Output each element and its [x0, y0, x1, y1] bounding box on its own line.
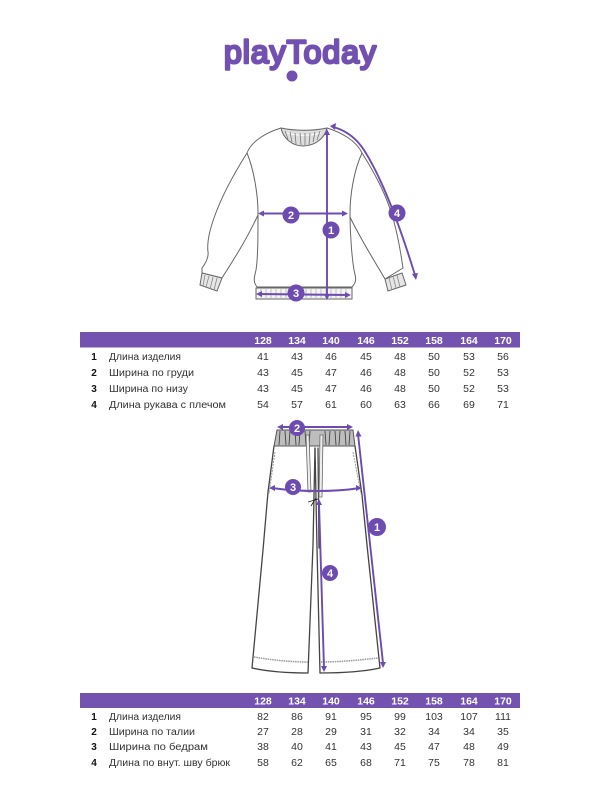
row 1: 82	[257, 711, 269, 723]
left cuff	[200, 273, 222, 291]
row 2: 35	[497, 726, 509, 738]
arrow 3: hem width: 3	[293, 288, 299, 300]
row 2: Ширина по груди	[109, 368, 194, 379]
row 4: 4	[91, 758, 97, 769]
row 4: 54	[257, 399, 269, 411]
row 2: 28	[291, 726, 303, 738]
table header: 146	[357, 696, 375, 708]
right cuff	[385, 273, 406, 291]
row 3: 3	[91, 384, 97, 395]
row 3: 52	[463, 383, 475, 395]
table header: 164	[460, 335, 478, 347]
trousers outline	[252, 430, 380, 673]
row 2: 48	[394, 367, 406, 379]
row 3: 40	[291, 741, 303, 753]
row 2: 34	[428, 726, 440, 738]
table header: 152	[391, 696, 409, 708]
hem stitches	[254, 657, 378, 662]
row 2	[91, 367, 509, 379]
row 3: 48	[463, 741, 475, 753]
arrow 3: hem width	[256, 284, 351, 302]
row 1: 111	[495, 711, 511, 723]
table header: 152	[391, 335, 409, 347]
row 2: 53	[497, 367, 509, 379]
row 2: 52	[463, 367, 475, 379]
row 1: 43	[291, 351, 303, 363]
logo: playToday: playToday	[224, 34, 376, 70]
row 2: 27	[257, 726, 269, 738]
row 4: 63	[394, 399, 406, 411]
row 3	[91, 741, 509, 753]
row 2: 46	[360, 367, 372, 379]
row 4: 69	[463, 399, 475, 411]
sweater diagram	[200, 123, 418, 302]
table header: 134	[288, 696, 306, 708]
arrow 2: chest width	[258, 206, 348, 224]
row 3: 43	[360, 741, 372, 753]
row 1: 41	[257, 351, 269, 363]
row 3: 45	[394, 741, 406, 753]
row 1: 103	[425, 711, 443, 723]
row 3: 3	[91, 742, 97, 753]
row 2: 34	[463, 726, 475, 738]
row 1: 95	[360, 711, 372, 723]
arrow 4: inseam length: 4	[327, 568, 334, 580]
table header: 164	[460, 696, 478, 708]
arrow 4: inseam length	[316, 499, 338, 672]
row 3	[91, 383, 509, 395]
row 3: Ширина по бедрам	[109, 741, 208, 753]
pockets	[269, 452, 361, 494]
row 1: 48	[394, 351, 406, 363]
trousers size table	[80, 693, 520, 769]
row 4: 78	[463, 757, 475, 769]
table header: 140	[322, 696, 340, 708]
arrow 4: sleeve length: 4	[394, 208, 401, 220]
row 4	[91, 757, 509, 769]
row 1: 99	[394, 711, 406, 723]
arrow 1: garment length	[322, 129, 340, 300]
row 1: Длина изделия	[109, 352, 181, 363]
row 4: 71	[497, 399, 509, 411]
row 3: 38	[257, 741, 269, 753]
row 4: 65	[325, 757, 337, 769]
table header: 170	[494, 335, 512, 347]
row 2: 29	[325, 726, 337, 738]
crotch stitch	[308, 498, 318, 506]
table header	[80, 332, 520, 348]
arrow 4: sleeve length	[330, 123, 418, 280]
row 2	[91, 726, 509, 738]
table header: 158	[425, 335, 443, 347]
arrow 3: hip width: 3	[290, 482, 296, 494]
row 1: 107	[460, 711, 478, 723]
row 3: 50	[428, 383, 440, 395]
row 1: 1	[91, 712, 97, 723]
row 3: 47	[428, 741, 440, 753]
row 3: 41	[325, 741, 337, 753]
arrow 1: trousers length	[356, 430, 386, 668]
row 3: 43	[257, 383, 269, 395]
row 4: 71	[394, 757, 406, 769]
arrow 3: hip width	[269, 479, 362, 495]
row 1	[91, 711, 511, 723]
row 2: 47	[325, 367, 337, 379]
row 2: 43	[257, 367, 269, 379]
arrow 2: chest width: 2	[288, 210, 294, 222]
row 4: Длина рукава с плечом	[109, 400, 226, 411]
table header: 128	[254, 696, 272, 708]
row 3: 45	[291, 383, 303, 395]
table header: 128	[254, 335, 272, 347]
row 2: Ширина по талии	[109, 727, 195, 738]
row 4: 81	[497, 757, 509, 769]
hem rib	[256, 288, 352, 299]
row 3: 46	[360, 383, 372, 395]
row 3: 53	[497, 383, 509, 395]
row 1: 50	[428, 351, 440, 363]
row 1: 86	[291, 711, 303, 723]
row 1: 53	[463, 351, 475, 363]
sweater outline	[200, 128, 406, 299]
arrow 2: waist width	[277, 420, 353, 436]
table header: 158	[425, 696, 443, 708]
row 4: 62	[291, 757, 303, 769]
arrow 2: waist width: 2	[294, 423, 300, 435]
table header: 140	[322, 335, 340, 347]
row 4: 60	[360, 399, 372, 411]
table header: 146	[357, 335, 375, 347]
row 1: 46	[325, 351, 337, 363]
row 1: 56	[497, 351, 509, 363]
row 4: 58	[257, 757, 269, 769]
row 2: 2	[91, 368, 97, 379]
row 3: 48	[394, 383, 406, 395]
row 1	[91, 351, 509, 363]
row 4: 68	[360, 757, 372, 769]
row 1: 45	[360, 351, 372, 363]
row 1: 1	[91, 352, 97, 363]
table header	[80, 693, 520, 708]
row 4: 4	[91, 400, 97, 411]
arrow 1: trousers length: 1	[374, 522, 380, 534]
row 1: 91	[325, 711, 337, 723]
row 4: Длина по внут. шву брюк	[109, 757, 231, 769]
drawstrings	[306, 435, 311, 492]
trousers diagram	[252, 420, 386, 673]
row 4: 66	[428, 399, 440, 411]
waistband	[274, 430, 355, 446]
table header: 170	[494, 696, 512, 708]
table header: 134	[288, 335, 306, 347]
row 2: 50	[428, 367, 440, 379]
row 2: 45	[291, 367, 303, 379]
row 2: 2	[91, 727, 97, 738]
row 4: 57	[291, 399, 303, 411]
row 3: 47	[325, 383, 337, 395]
row 4	[91, 399, 509, 411]
row 4: 61	[325, 399, 337, 411]
row 1: Длина изделия	[109, 712, 181, 723]
row 3: 49	[497, 741, 509, 753]
collar	[281, 128, 327, 146]
row 2: 32	[394, 726, 406, 738]
arrow 1: garment length: 1	[328, 225, 334, 237]
row 4: 75	[428, 757, 440, 769]
row 2: 31	[360, 726, 372, 738]
sweater size table	[80, 332, 520, 411]
row 3: Ширина по низу	[109, 384, 188, 395]
